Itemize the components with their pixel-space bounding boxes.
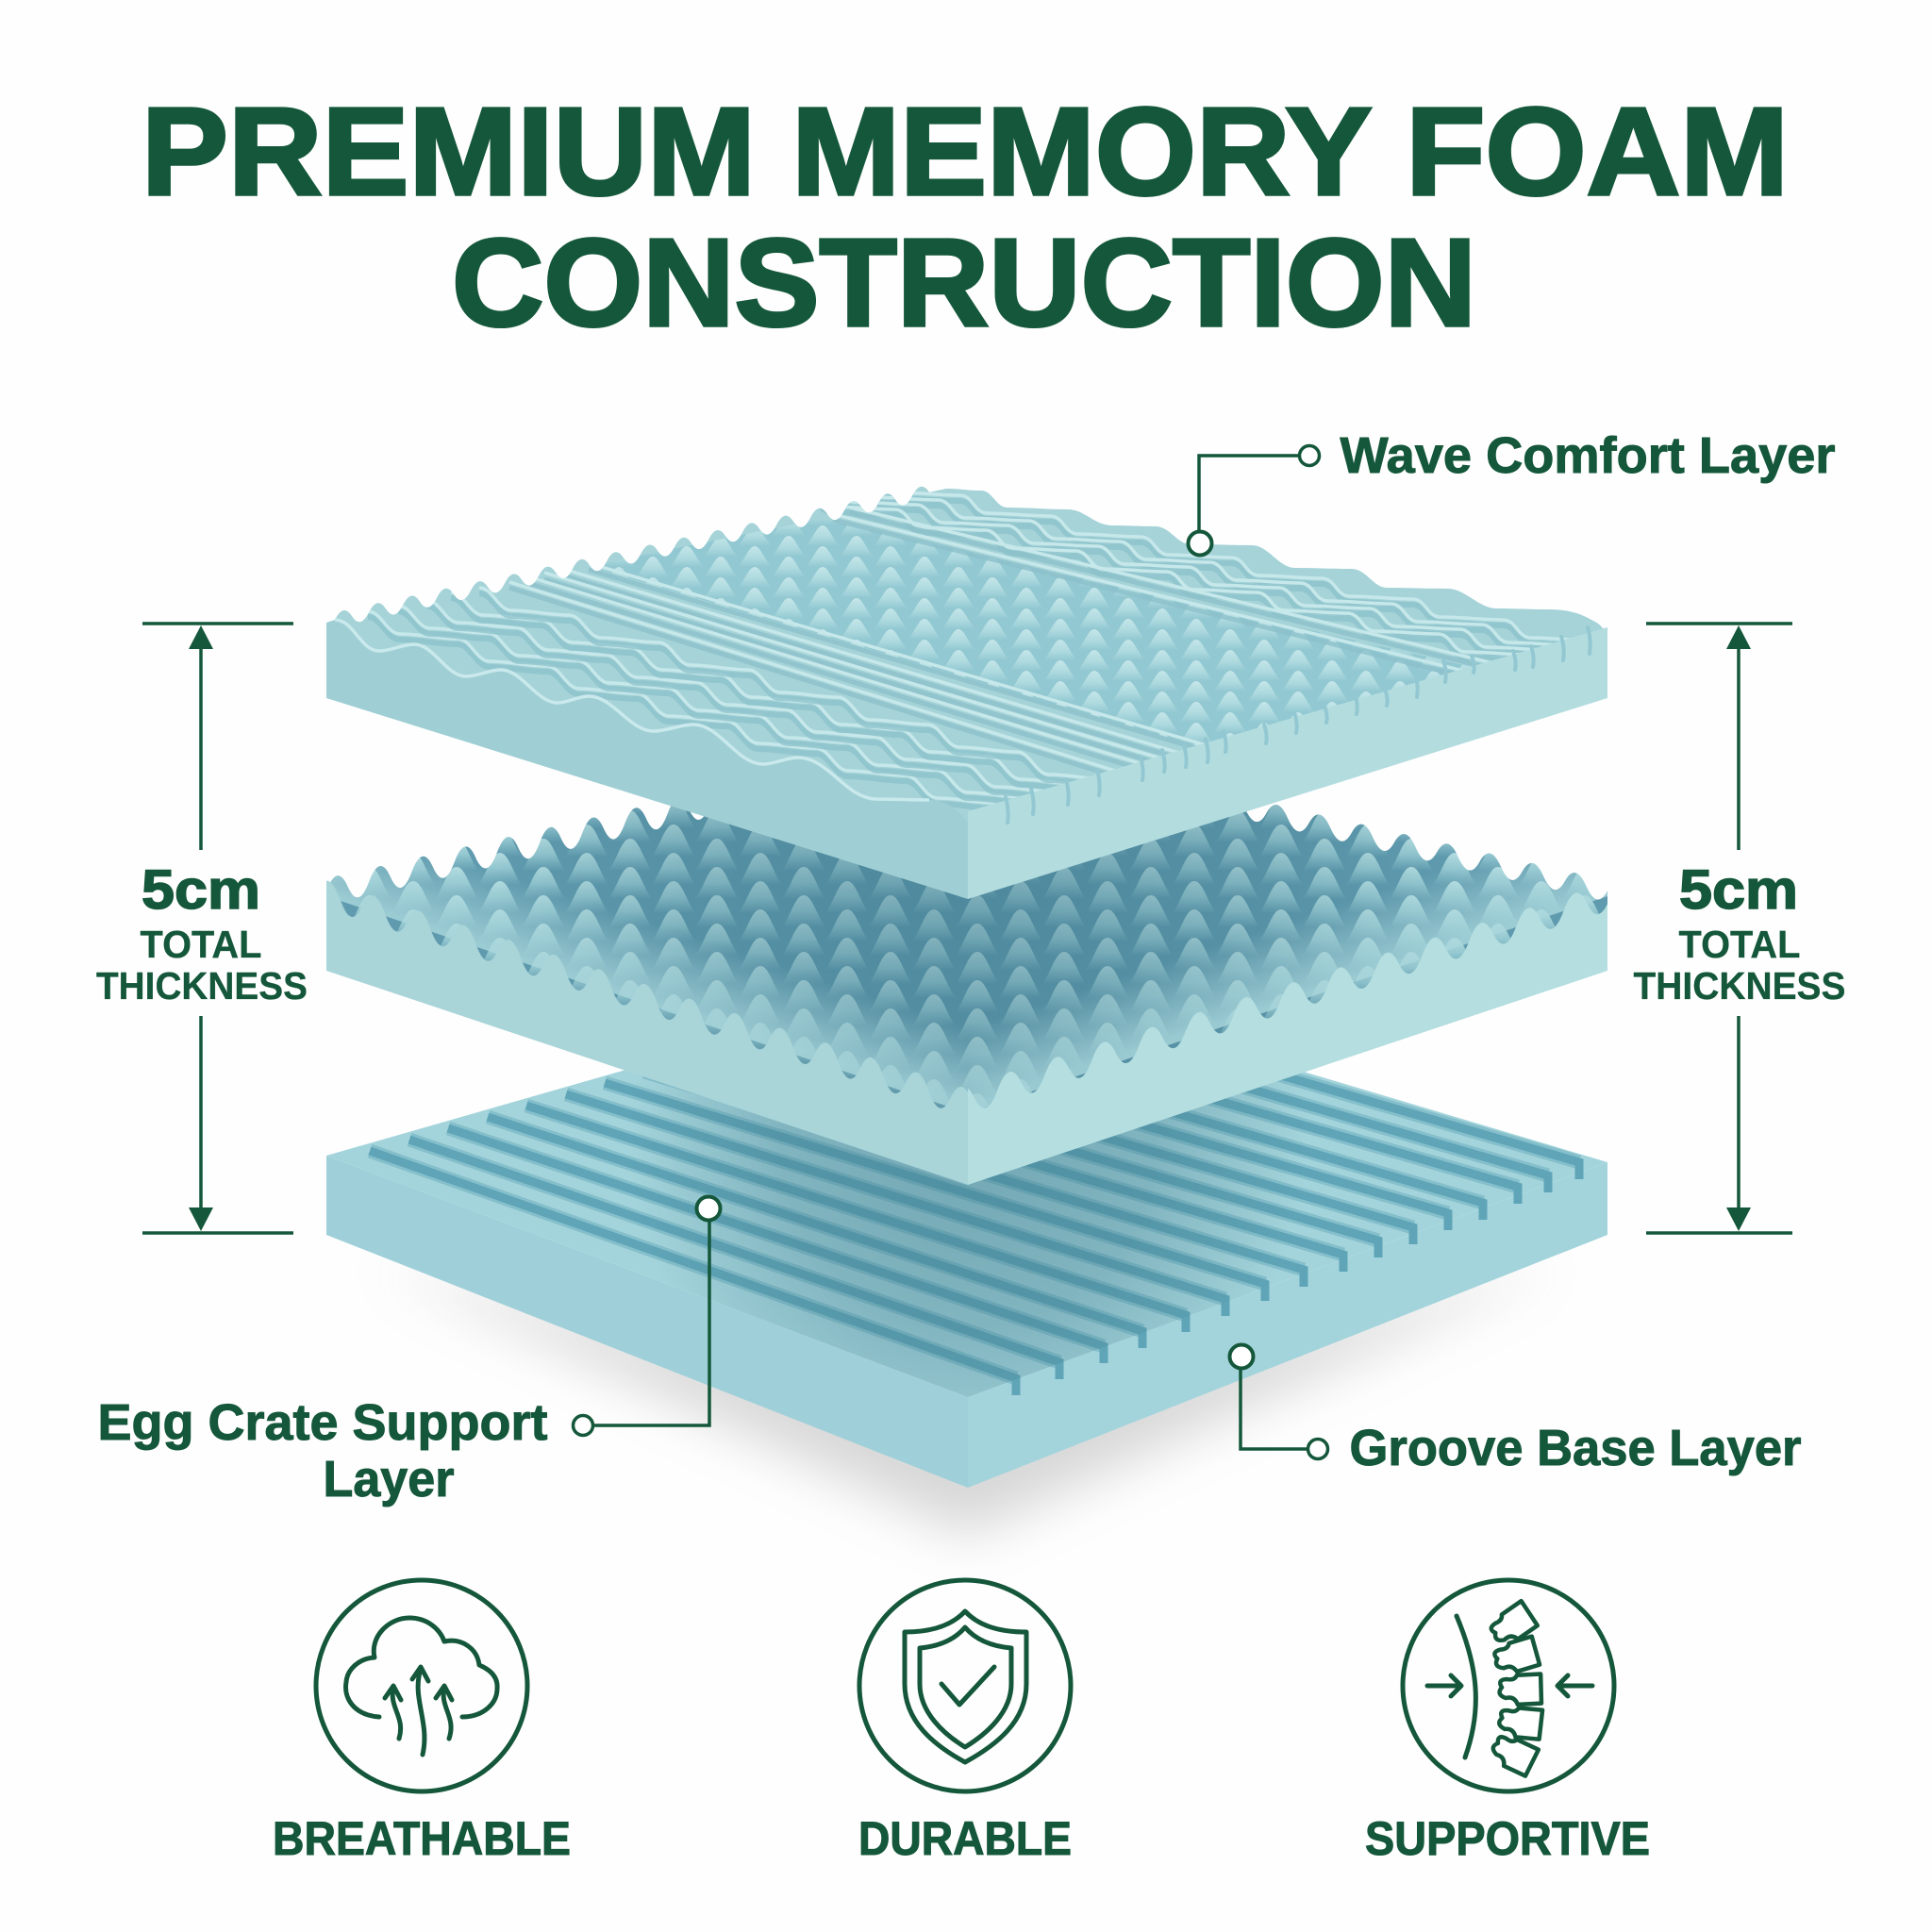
callout: groove base layer — [1230, 1345, 1802, 1476]
groove callout leader — [1241, 1369, 1307, 1449]
wave layer left side — [326, 620, 968, 899]
durable label: DURABLE — [858, 1812, 1072, 1865]
breathable label: BREATHABLE — [273, 1812, 571, 1865]
left dimension text: TOTAL — [140, 923, 262, 966]
callout: wave comfort layer — [1189, 427, 1836, 555]
right dimension text: THICKNESS — [1634, 964, 1845, 1008]
egg crate left side — [326, 881, 968, 1185]
supportive label: SUPPORTIVE — [1365, 1812, 1650, 1865]
wave edge highlight — [335, 620, 929, 800]
left dimension text: THICKNESS — [96, 964, 308, 1008]
egg crate top face — [330, 805, 1607, 1108]
groove channels — [370, 981, 1579, 1395]
front straight ridges — [509, 570, 1225, 785]
left dimension text — [96, 859, 308, 1008]
left dimension text: 5cm — [142, 859, 260, 921]
callout: egg crate support layer — [98, 1196, 721, 1507]
wave callout leader — [1199, 456, 1299, 531]
egg crate right side — [968, 892, 1607, 1185]
icon: spine with pressure arrows — [1403, 1580, 1614, 1791]
foam layer: groove base — [326, 972, 1607, 1488]
left dimension arrowheads — [189, 625, 213, 1231]
wave layer right side — [968, 627, 1607, 899]
title: CONSTRUCTION — [452, 213, 1476, 352]
title: PREMIUM MEMORY FOAM — [142, 82, 1789, 221]
feature: breathable — [273, 1580, 571, 1865]
groove soft walls — [370, 981, 1579, 1378]
right dimension text — [1634, 859, 1845, 1008]
feature: supportive — [1365, 1580, 1650, 1865]
wave layer top face — [336, 487, 1604, 823]
foam layer: wave comfort — [321, 472, 1684, 899]
right dimension text: 5cm — [1679, 859, 1798, 921]
feature: durable — [858, 1580, 1072, 1865]
right dimension bracket lines — [1646, 624, 1792, 1233]
back wave ridges — [819, 491, 1571, 660]
groove callout label: Groove Base Layer — [1349, 1420, 1802, 1476]
ridge end notches — [1006, 627, 1591, 823]
egg crate callout label: Egg Crate Support — [98, 1394, 548, 1451]
icon: cloud with airflow arrows — [316, 1580, 527, 1791]
icon: shield with check — [859, 1580, 1071, 1791]
egg crate callout label: Layer — [323, 1451, 455, 1507]
title — [142, 82, 1789, 352]
egg crate centre zone — [589, 519, 1505, 755]
back straight ridges — [832, 515, 1481, 673]
egg crate callout label — [98, 1394, 548, 1507]
wave callout label: Wave Comfort Layer — [1340, 427, 1836, 484]
front wave ridges — [368, 586, 1089, 809]
egg crate callout leader — [593, 1221, 709, 1425]
right thickness dimension — [1634, 624, 1845, 1233]
foam layer: egg crate support — [326, 805, 1607, 1185]
groove base top face — [326, 972, 1607, 1397]
right dimension text: TOTAL — [1679, 923, 1800, 966]
right dimension arrowheads — [1726, 625, 1751, 1231]
groove base right side — [968, 1162, 1607, 1488]
groove base left side — [326, 1156, 968, 1488]
left thickness dimension — [96, 624, 308, 1233]
left dimension bracket lines — [142, 624, 293, 1233]
shadow cast on groove base — [326, 972, 1607, 1397]
soft floor shadow — [377, 1264, 1557, 1536]
